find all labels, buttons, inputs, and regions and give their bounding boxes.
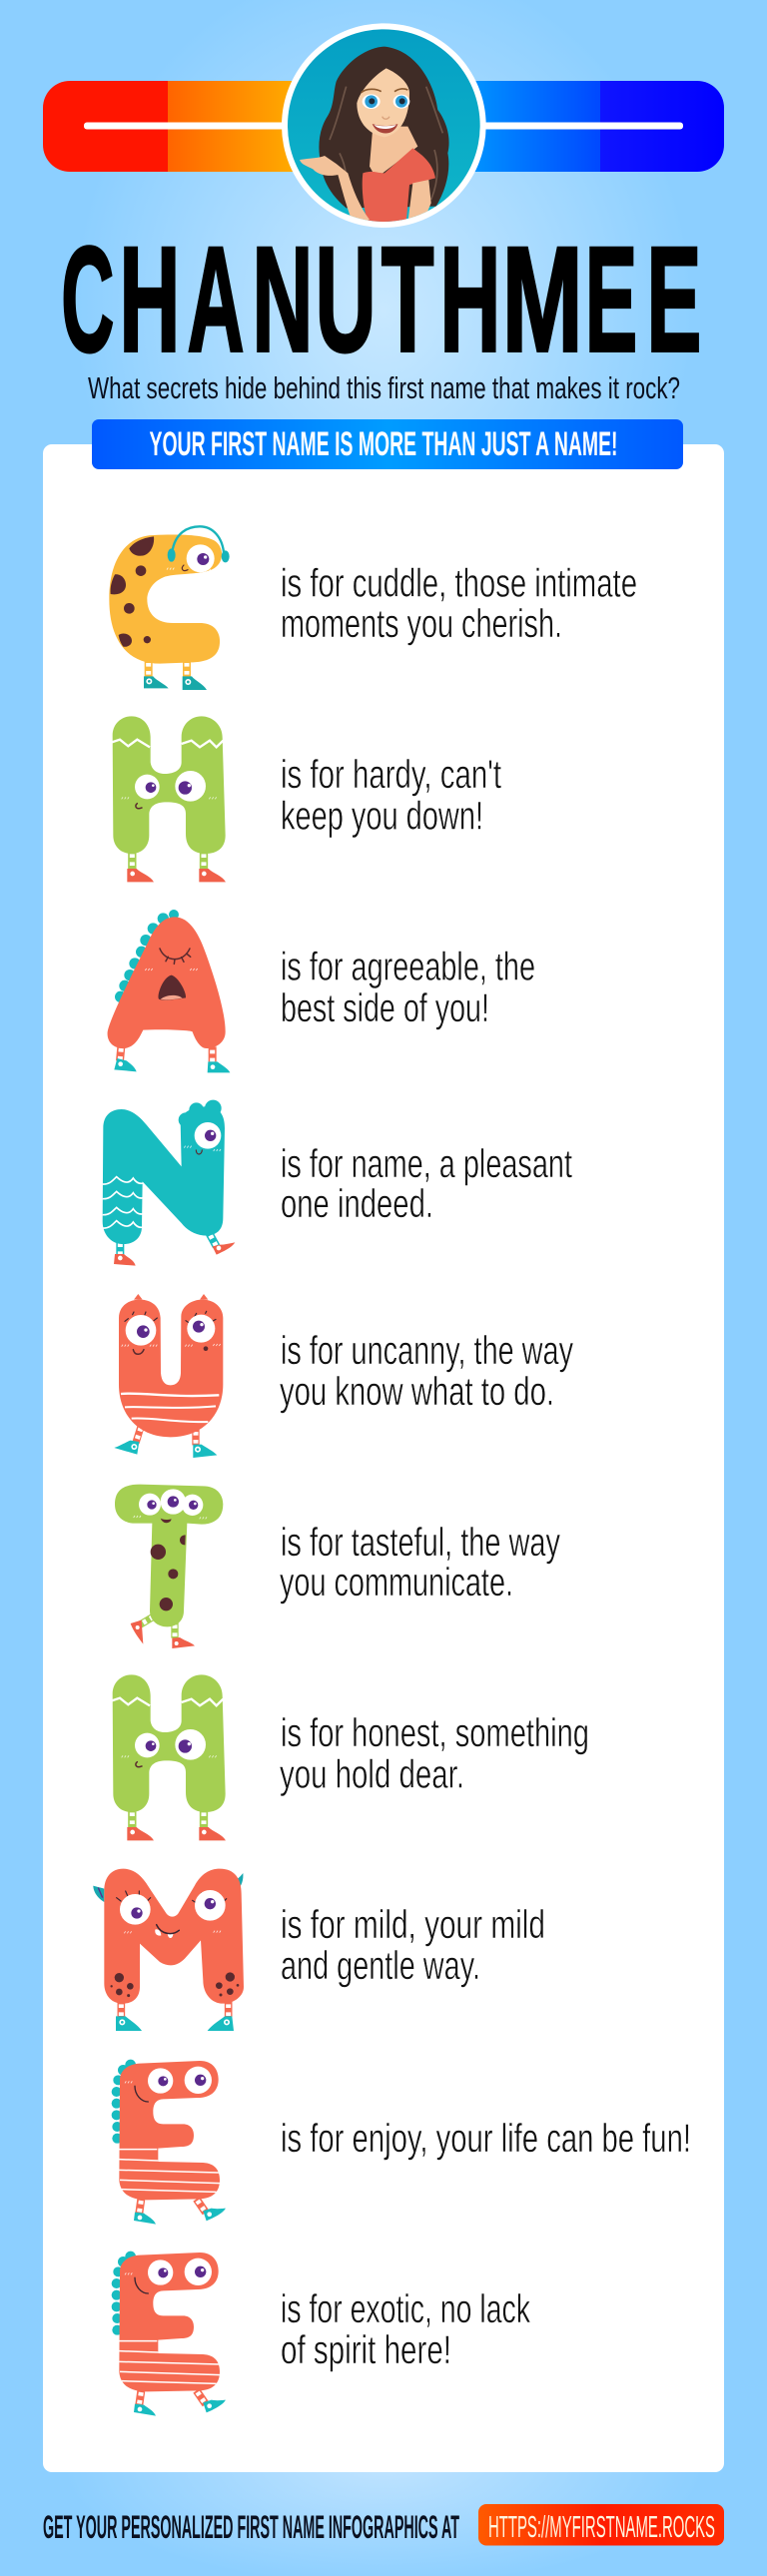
monster letter E second <box>112 2252 226 2416</box>
sentence N <box>281 1142 572 1226</box>
portrait: woman with long brown hair <box>282 23 486 228</box>
header bar <box>43 81 724 172</box>
monster letter N <box>103 1100 235 1266</box>
sentence U: you know what to do. <box>280 1370 554 1414</box>
sentence C: is for cuddle, those intimate <box>281 561 637 605</box>
title: C <box>61 216 114 383</box>
sentence A: best side of you! <box>281 986 489 1030</box>
sentence T: is for tasteful, the way <box>281 1521 560 1565</box>
sentence H second: you hold dear. <box>280 1753 464 1797</box>
title: A <box>188 216 244 383</box>
title: M <box>502 216 583 383</box>
sentence H <box>281 753 501 839</box>
monster letter U <box>114 1294 223 1458</box>
monster letter H second <box>112 1674 226 1840</box>
sentence C <box>281 561 637 646</box>
title: H <box>439 216 500 383</box>
sentence E second <box>281 2287 530 2372</box>
title <box>61 216 701 383</box>
title: E <box>585 216 637 383</box>
monster letter E <box>112 2060 226 2225</box>
sentence C: moments you cherish. <box>281 602 562 646</box>
sentence E second: of spirit here! <box>281 2328 451 2372</box>
sentence N: is for name, a pleasant <box>281 1142 572 1186</box>
sentence E second: is for exotic, no lack <box>281 2287 530 2331</box>
sentence T: you communicate. <box>280 1561 513 1605</box>
monster letter M <box>93 1869 244 2031</box>
monster letter H <box>112 716 226 882</box>
sentence M <box>281 1903 545 1988</box>
title: T <box>382 216 433 383</box>
banner <box>92 419 683 469</box>
monster letter C <box>109 526 230 690</box>
sentence H second <box>280 1711 589 1797</box>
sentence U <box>280 1329 573 1414</box>
sentence M: is for mild, your mild <box>281 1903 545 1947</box>
title: N <box>252 216 313 383</box>
monster letter T <box>115 1485 223 1648</box>
sentence M: and gentle way. <box>281 1944 480 1988</box>
sentence T <box>280 1521 560 1605</box>
sentence N: one indeed. <box>281 1182 433 1226</box>
sentence H: keep you down! <box>281 795 483 839</box>
sentence H: is for hardy, can't <box>281 753 501 797</box>
sentence U: is for uncanny, the way <box>281 1329 573 1373</box>
monster letter A <box>108 910 230 1072</box>
sentence H second: is for honest, something <box>281 1711 589 1755</box>
title: H <box>119 216 180 383</box>
white content panel <box>43 444 724 2472</box>
sentence A: is for agreeable, the <box>281 945 535 988</box>
sentence A <box>281 945 535 1030</box>
title: E <box>647 216 701 383</box>
title: U <box>316 216 377 383</box>
